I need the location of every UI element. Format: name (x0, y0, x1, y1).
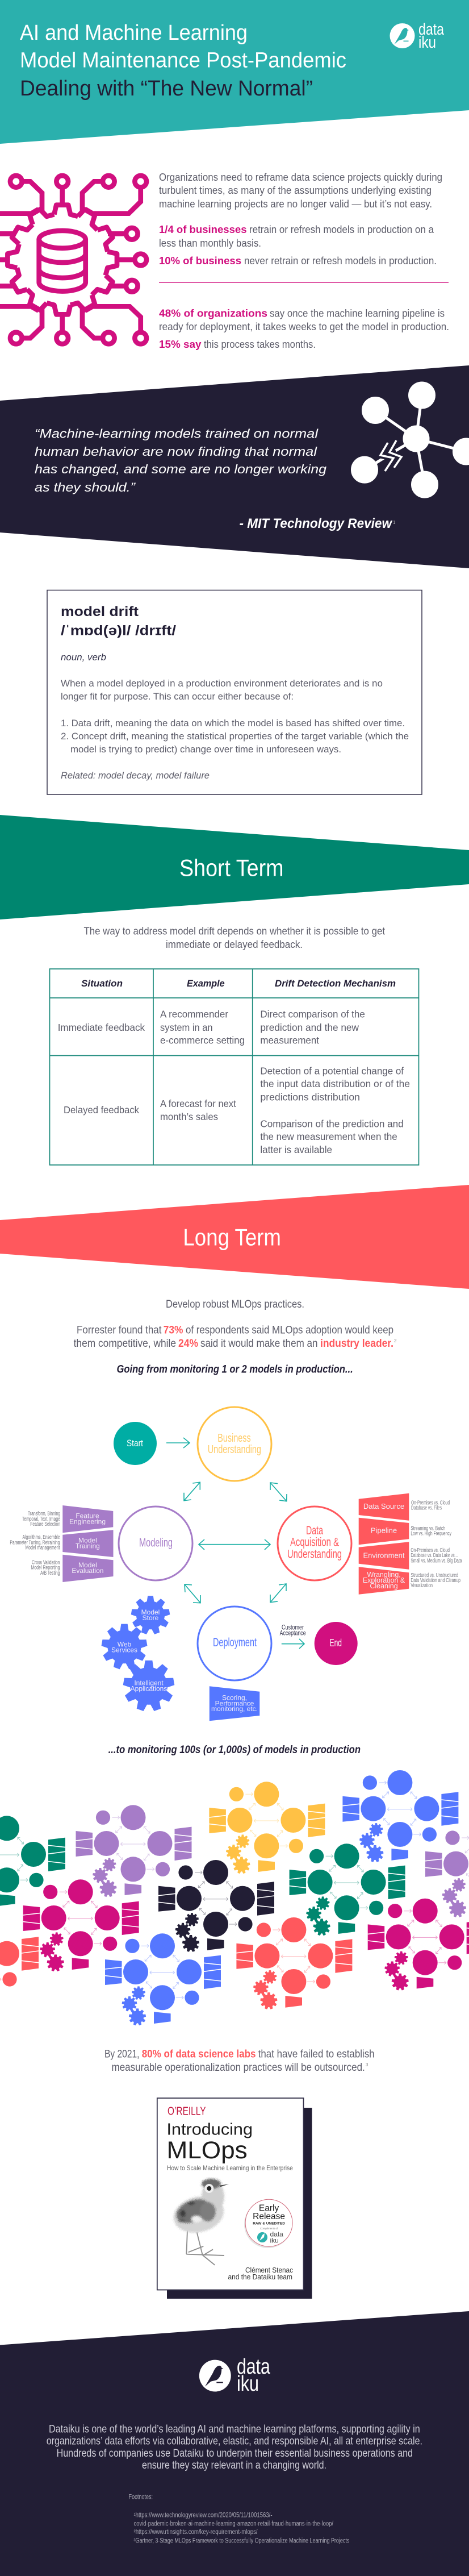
text block: deployment statistics: say once the machine learning pipeline is (270, 307, 445, 319)
data notes: On-Premises vs. Cloud (411, 1547, 450, 1554)
text block: long term intro: industry leader. (320, 1338, 393, 1350)
node: data acquisition and understanding: Data (306, 1524, 323, 1537)
book title: O’REILLY (168, 2105, 206, 2118)
definition heading (61, 604, 176, 639)
book title: Introducing (167, 2121, 253, 2139)
modeling notes: Cross Validation (32, 1560, 60, 1566)
data notes: Streaming vs. Batch (411, 1525, 445, 1532)
node: end (315, 1622, 358, 1665)
badge: early release: iku (270, 2237, 279, 2245)
data steps: Cleaning (370, 1582, 398, 1590)
chart: many model lifecycles (0, 1770, 469, 2025)
gear: model store (131, 1596, 170, 1634)
book authors (228, 2266, 293, 2281)
quote: has changed, and some are no longer working (35, 462, 327, 476)
definition body: model is trying to predict) change over time in unforeseen ways. (70, 744, 341, 755)
modeling steps: Model (78, 1561, 97, 1569)
text block: retraining statistics: never retrain or refresh models in production. (244, 255, 437, 267)
icon: broken network (352, 383, 469, 497)
text block: about dataiku (47, 2423, 422, 2471)
node: data acquisition and understanding: Acquisition & (290, 1536, 339, 1549)
footnotes (129, 2494, 350, 2545)
footnotes: Footnotes: (129, 2494, 153, 2500)
panel: footer (0, 2311, 469, 2576)
book authors: and the Dataiku team (228, 2273, 292, 2281)
badge: early release: data (270, 2230, 283, 2238)
text block: long term intro (74, 1299, 397, 1350)
modeling steps: Model (78, 1536, 97, 1544)
text block: deployment statistics: 48% of organizations (159, 307, 267, 319)
table: drift detection (50, 969, 419, 1165)
modeling steps: Engineering (69, 1518, 106, 1526)
gear: intelligent applications: Applications (131, 1685, 167, 1693)
text block: short term intro (84, 925, 385, 950)
label: customer acceptance (280, 1624, 306, 1637)
data steps: Wrangling, (367, 1571, 401, 1579)
table row: immediate feedback: system in an (160, 1022, 213, 1033)
icon: dataiku logo footer: iku (237, 2372, 259, 2396)
text block: retraining statistics: retrain or refresh models in production on a (249, 223, 434, 235)
definition body: longer fit for purpose. This can occur either because of: (61, 692, 294, 702)
gear: intelligent applications (123, 1661, 175, 1712)
panel: model drift definition (47, 590, 422, 794)
definition body: noun, verb (61, 652, 106, 663)
icon: circuit gear with database (0, 176, 146, 344)
book authors: Clément Stenac (245, 2266, 293, 2274)
heading: short term: Short Term (179, 855, 284, 881)
quote: as they should.” (35, 480, 136, 494)
node: start (114, 1422, 157, 1465)
text block: outsourcing statistic: By 2021, (104, 2049, 140, 2061)
subheading: going from 1 or 2 models: Going from monitoring 1 or 2 models in production... (117, 1364, 353, 1376)
node: business understanding: Understanding (208, 1443, 261, 1456)
quote: “Machine-learning models trained on normal (35, 426, 319, 441)
modeling steps: Evaluation (72, 1567, 103, 1575)
gear: web services: Web (118, 1640, 132, 1648)
text block: outsourcing statistic: measurable operationalization practices will be outsourced. (111, 2062, 365, 2074)
table header: Drift Detection Mechanism (275, 978, 396, 989)
icon: dataiku logo (390, 20, 445, 52)
footnotes: ²https://www.rtinsights.com/key-requirement-mlops/ (134, 2529, 258, 2536)
table row: immediate feedback: A recommender (160, 1008, 228, 1019)
icon: bird illustration (170, 2179, 229, 2265)
node: deployment (198, 1607, 271, 1680)
gear: intelligent applications: Intelligent (134, 1679, 164, 1687)
modeling notes: Algorithms, Ensemble (23, 1534, 60, 1541)
modeling notes (10, 1511, 60, 1576)
modeling steps: Training (76, 1542, 100, 1550)
deployment step: scoring: Performance (215, 1699, 254, 1707)
text block: long term intro: of respondents said MLOps adoption would keep (186, 1325, 393, 1337)
icon: dataiku logo footer: data (237, 2355, 270, 2379)
deployment step: scoring: monitoring, etc. (211, 1705, 258, 1713)
text block: short term intro: immediate or delayed feedback. (166, 939, 303, 950)
definition body: When a model deployed in a production environment deteriorates and is no (61, 679, 383, 689)
text block: deployment statistics: ready for deployment, it takes weeks to get the model in production. (159, 321, 449, 332)
table row: delayed feedback: predictions distribution (260, 1091, 360, 1102)
book title: How to Scale Machine Learning in the Enterprise (167, 2164, 293, 2172)
deployment step: scoring: Scoring, (222, 1694, 247, 1702)
table row: delayed feedback: month’s sales (160, 1111, 218, 1122)
footnotes: covid-pademic-broken-ai-machine-learning-amazon-retail-fraud-humans-in-the-loop/ (134, 2521, 334, 2528)
icon: dataiku logo: data (418, 20, 445, 39)
text block: long term intro: Develop robust MLOps practices. (166, 1299, 304, 1310)
modeling notes: Feature Selection (30, 1521, 60, 1528)
data steps: Pipeline (371, 1526, 397, 1534)
table row: delayed feedback: Delayed feedback (64, 1104, 139, 1116)
table row: delayed feedback: A forecast for next (160, 1098, 236, 1109)
text block: about dataiku: ensure they stay relevant in a changing world. (142, 2459, 326, 2471)
arrows between stages (166, 1438, 304, 1649)
data steps: Data Source (363, 1502, 404, 1510)
data steps: Environment (363, 1551, 405, 1560)
subheading: to monitoring 100s of models: ...to monitoring 100s (or 1,000s) of models in production (108, 1744, 361, 1756)
data notes: Visualization (411, 1583, 433, 1589)
table row: delayed feedback: latter is available (260, 1144, 332, 1155)
definition heading: /ˈmɒd(ə)l/ /drɪft/ (61, 623, 176, 639)
node: business understanding: Business (217, 1432, 251, 1445)
text block: outsourcing statistic: that have failed to establish (258, 2049, 375, 2061)
node: data acquisition and understanding (278, 1507, 351, 1580)
node: start: Start (127, 1438, 143, 1449)
heading: long term: Long Term (183, 1224, 281, 1251)
icon: dataiku logo: iku (418, 34, 436, 52)
definition body: Related: model decay, model failure (61, 771, 210, 781)
data notes: On-Premises vs. Cloud (411, 1500, 450, 1507)
gear: web services: Services (111, 1646, 137, 1654)
icon: dataiku logo footer (199, 2355, 270, 2396)
table row: immediate feedback: e-commerce setting (160, 1034, 245, 1046)
text block: introduction: Organizations need to reframe data science projects quickly during (159, 171, 442, 183)
badge: early release (244, 2199, 292, 2248)
title: Model Maintenance Post-Pandemic (20, 49, 346, 73)
modeling notes: Temporal, Text, Image (22, 1516, 60, 1522)
data steps (359, 1493, 409, 1595)
footnotes: ³Gartner, 3-Stage MLOps Framework to Successfully Operationalize Machine Learning Projects (134, 2538, 350, 2545)
node: data acquisition and understanding: Understanding (287, 1548, 342, 1561)
node: modeling (119, 1507, 192, 1580)
text block: introduction: turbulent times, as many of the assumptions underlying existing (159, 184, 432, 196)
node: deployment: Deployment (213, 1636, 257, 1649)
gear: model store: Model (141, 1608, 160, 1616)
data notes (411, 1500, 462, 1589)
table row: delayed feedback: the input data distribution or of the (260, 1078, 410, 1089)
badge: early release: Compliments of (260, 2227, 278, 2230)
modeling notes: A/B Testing (40, 1570, 60, 1576)
text block: outsourcing statistic: 80% of data science labs (142, 2049, 256, 2061)
panel: long term banner (0, 1185, 469, 1289)
text block: outsourcing statistic: 3 (366, 2062, 368, 2067)
table row: immediate feedback: prediction and the new (260, 1022, 359, 1033)
definition body: 1. Data drift, meaning the data on which the model is based has shifted over time. (61, 718, 405, 729)
table row: delayed feedback: Detection of a potential change of (260, 1065, 404, 1076)
modeling notes: Transform, Binning (28, 1511, 60, 1517)
badge: early release: Release (253, 2212, 285, 2221)
modeling notes: Parameter Tuning, Retraining (10, 1540, 60, 1546)
panel: header banner (0, 0, 469, 144)
text block: long term intro: 24% (178, 1338, 198, 1350)
title (20, 21, 346, 101)
gear: web services (101, 1624, 148, 1670)
panel: short term banner (0, 815, 469, 919)
table row: delayed feedback: Comparison of the prediction and (260, 1118, 404, 1129)
definition body (61, 652, 409, 781)
text block: short term intro: The way to address model drift depends on whether it is possible to get (84, 925, 385, 937)
deployment step: scoring (210, 1686, 259, 1721)
table row: immediate feedback: Immediate feedback (58, 1022, 145, 1033)
text block: introduction (159, 171, 442, 210)
text block: long term intro: 73% (164, 1325, 183, 1337)
book title (167, 2105, 293, 2172)
text block: retraining statistics: 1/4 of businesses (159, 223, 246, 235)
badge: early release: RAW & UNEDITED (253, 2221, 285, 2225)
text block: retraining statistics: 10% of business (159, 255, 241, 267)
quote: human behavior are now finding that normal (35, 444, 317, 459)
text block: deployment statistics (159, 307, 449, 350)
definition body: 2. Concept drift, meaning the statistical properties of the target variable (which the (61, 731, 409, 742)
node: business understanding (198, 1407, 271, 1481)
text block: outsourcing statistic (104, 2049, 375, 2074)
table row: immediate feedback: measurement (260, 1034, 319, 1046)
chart: single model lifecycle diagram (10, 1407, 462, 1721)
text block: deployment statistics: 15% say (159, 338, 202, 350)
table row: delayed feedback: the new measurement when the (260, 1131, 397, 1142)
label: customer acceptance: Acceptance (280, 1629, 306, 1637)
text block: long term intro: Forrester found that (77, 1325, 162, 1337)
label: customer acceptance: Customer (282, 1624, 304, 1632)
text block: long term intro: them competitive, while (74, 1338, 176, 1350)
quote attribution: - MIT Technology Review (240, 516, 392, 531)
table row: immediate feedback: Direct comparison of the (260, 1008, 365, 1019)
table row: delayed feedback (64, 1065, 410, 1155)
table row: immediate feedback (58, 1008, 365, 1046)
text block: deployment statistics: this process takes months. (204, 338, 316, 350)
text block: retraining statistics: less than monthly basis. (159, 237, 261, 249)
node: end: End (330, 1637, 342, 1649)
text block: introduction: machine learning projects are no longer valid — but it’s not easy. (159, 198, 432, 210)
definition heading: model drift (61, 604, 139, 619)
badge: early release: Early (259, 2204, 279, 2213)
text block: long term intro: said it would make them an (200, 1338, 318, 1350)
data notes: Database vs. Files (411, 1505, 442, 1512)
modeling notes: Model management (25, 1545, 60, 1551)
table header: Situation (81, 978, 123, 989)
footnotes: ¹https://www.technologyreview.com/2020/05/11/1001563/- (134, 2512, 273, 2519)
modeling notes: Model Reporting (31, 1565, 60, 1571)
modeling steps: Feature (76, 1512, 99, 1520)
title: AI and Machine Learning (20, 21, 248, 45)
text block: long term intro: 2 (394, 1338, 397, 1343)
book cover (157, 2098, 312, 2299)
data steps: Exploration & (363, 1576, 405, 1584)
panel: quote band (0, 365, 469, 568)
node: modeling: Modeling (139, 1537, 173, 1550)
book title: MLOps (167, 2137, 248, 2164)
gear: model store: Store (143, 1614, 159, 1622)
text block: retraining statistics (159, 223, 437, 267)
quote (35, 426, 327, 494)
quote attribution: 1 (393, 520, 396, 525)
table header: Example (187, 978, 225, 989)
title: Dealing with “The New Normal” (20, 77, 313, 101)
modeling steps (62, 1505, 114, 1582)
table header (81, 978, 396, 989)
